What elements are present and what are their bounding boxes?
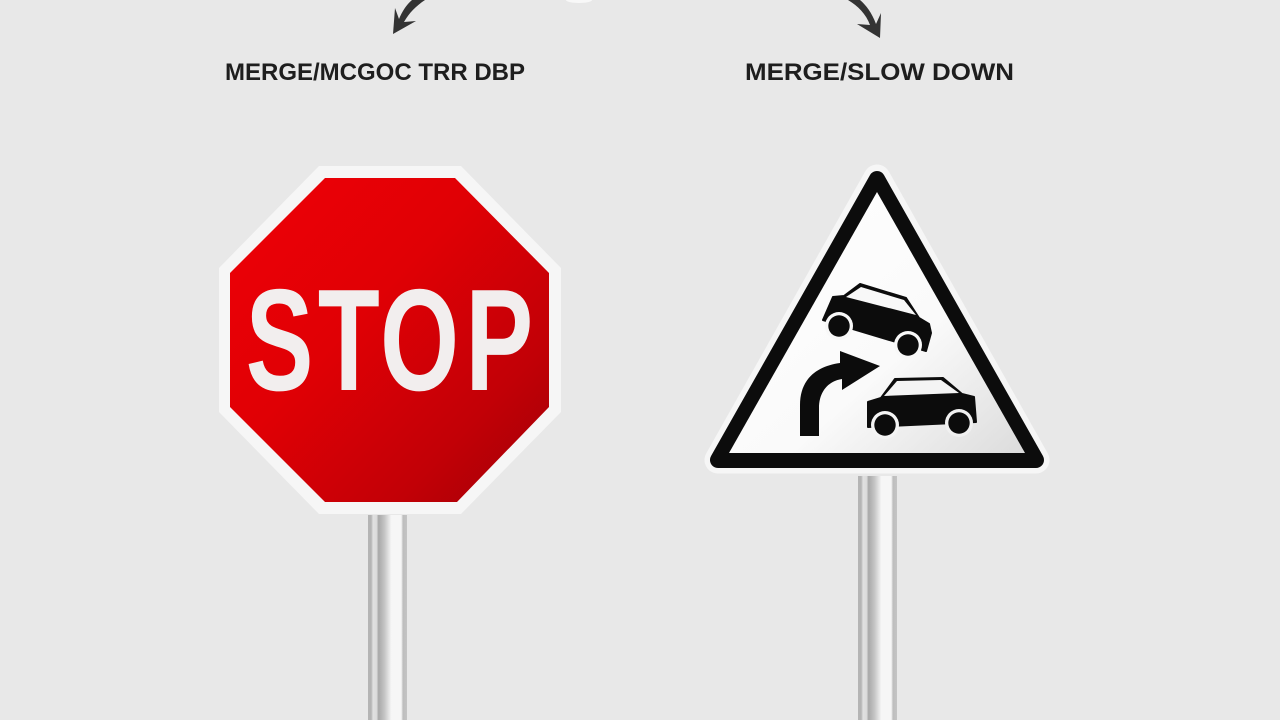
- icon: lower car: [868, 378, 976, 439]
- label: right sign: MERGE/SLOW DOWN: [745, 59, 1014, 86]
- merge warning sign: [718, 178, 1036, 460]
- triangle white halo: [718, 178, 1036, 460]
- arrow: pointing to right label: [848, 0, 881, 38]
- pole: merge sign: [858, 476, 897, 720]
- triangle white face: [729, 192, 1025, 453]
- stop sign: [219, 166, 561, 514]
- highlight: curve remnant at top edge: [566, 0, 592, 3]
- arrow: pointing to left label: [393, 0, 425, 34]
- stop sign white border: [219, 166, 561, 514]
- stop sign word: STOP: [246, 259, 533, 421]
- icon: merge arrow: [800, 351, 880, 436]
- label: left sign: MERGE/MCGOC TRR DBP: [225, 59, 525, 86]
- stop sign red octagon: [230, 178, 549, 502]
- triangle black border: [718, 179, 1036, 460]
- icon: upper tilted car: [823, 284, 931, 359]
- pole: stop sign: [368, 515, 407, 720]
